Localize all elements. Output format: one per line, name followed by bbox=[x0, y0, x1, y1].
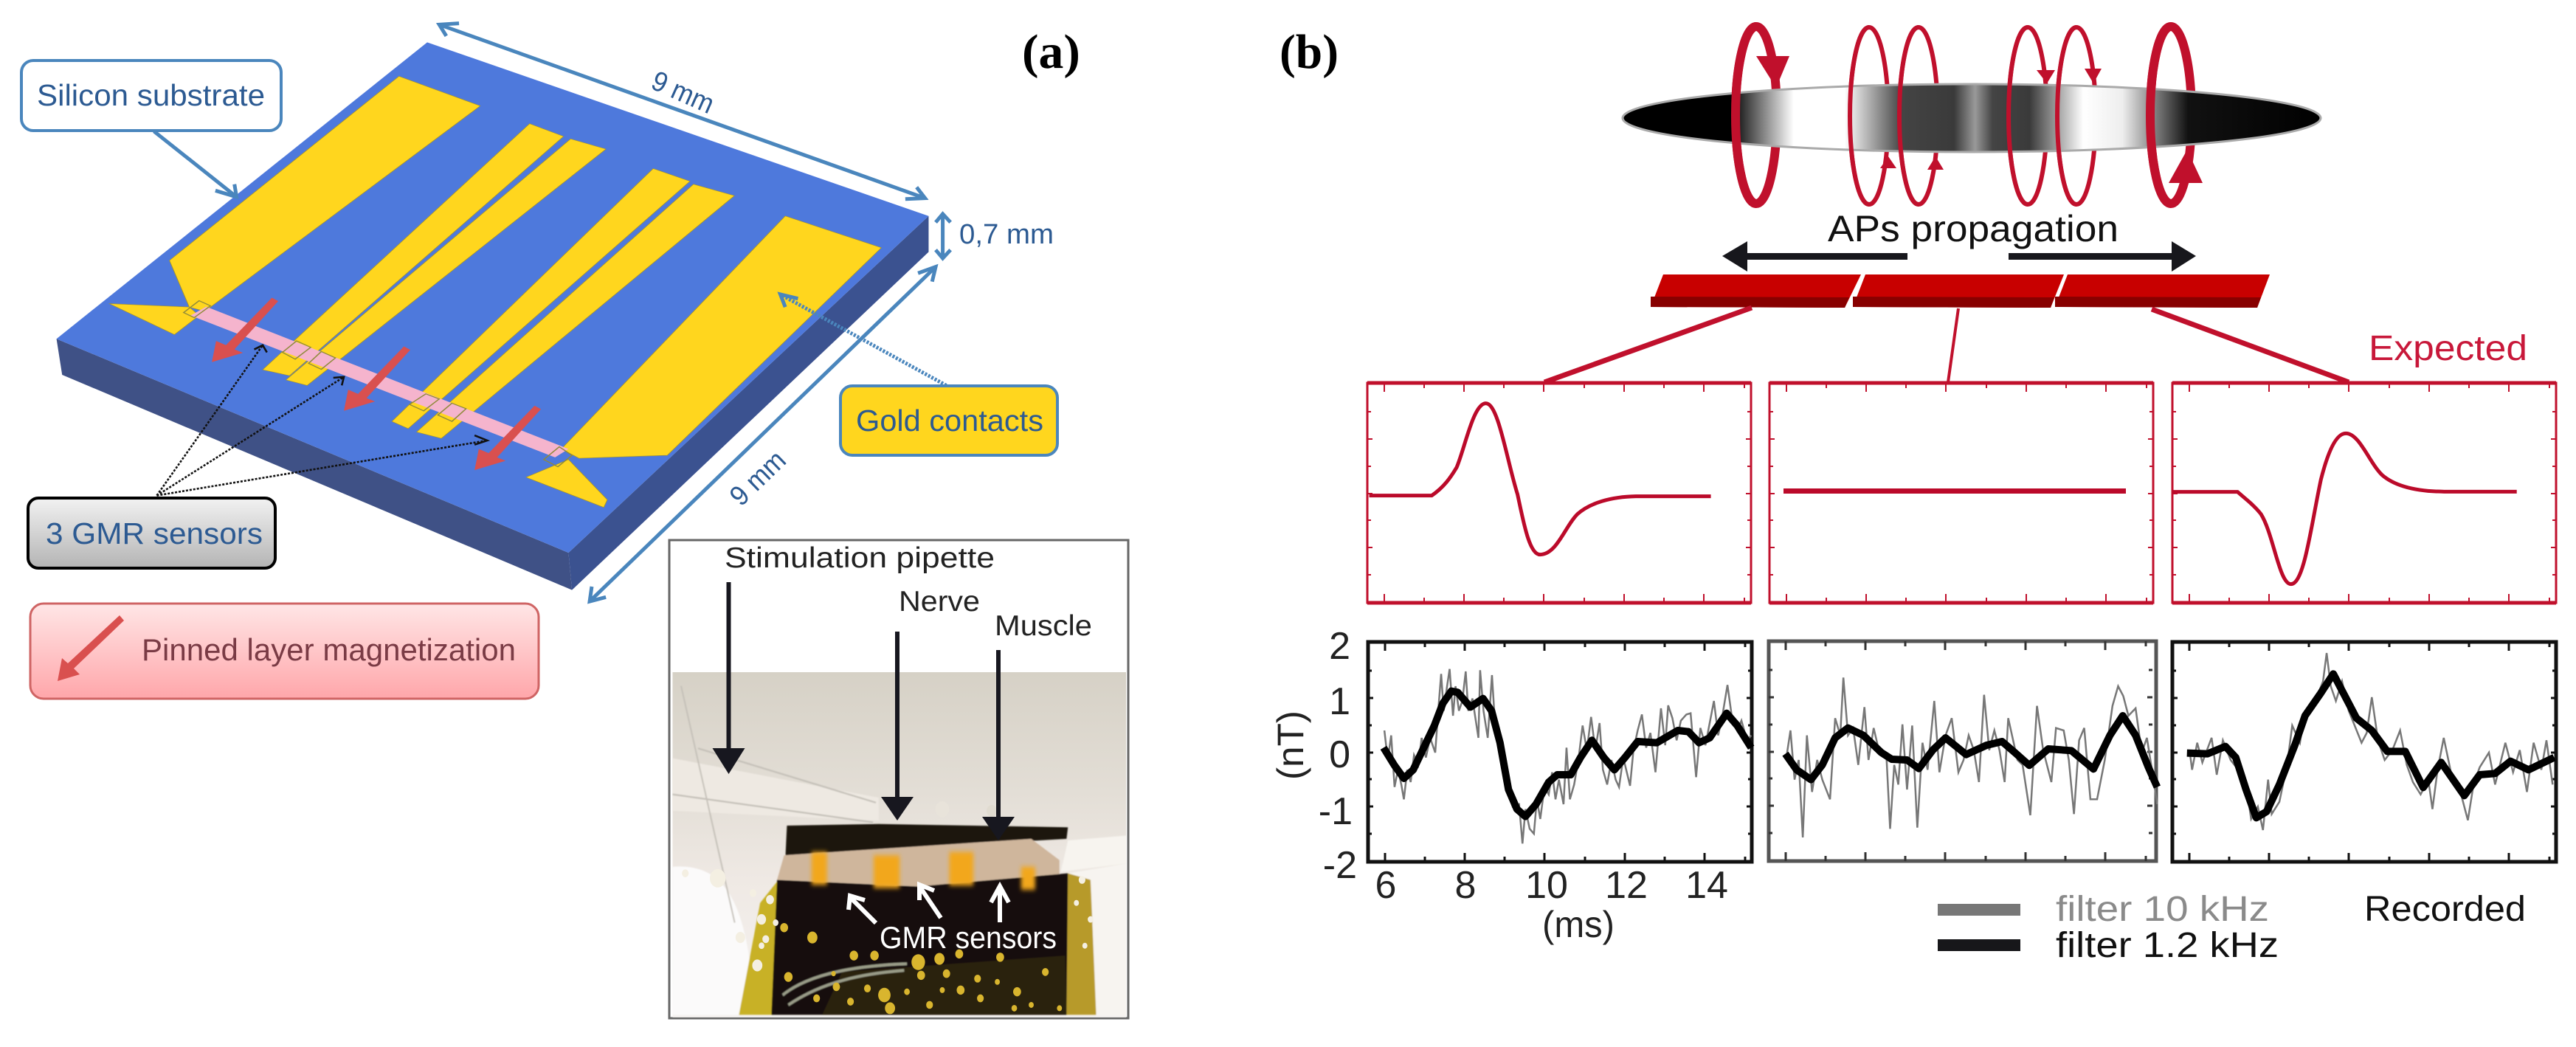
chart: recorded signal right bbox=[2172, 642, 2556, 862]
dimension label: thickness: 0,7 mm bbox=[959, 219, 1054, 250]
gold sensor traces seen through nerve bbox=[812, 852, 1035, 890]
dotted leader to gold contact bbox=[780, 294, 946, 385]
y axis tick labels: -2 bbox=[1323, 844, 1357, 887]
dotted arrows to sensors bbox=[156, 345, 487, 496]
sensor bar 3 bbox=[2055, 274, 2270, 308]
white arrow 3 bbox=[991, 886, 1009, 922]
leader line to silicon substrate bbox=[154, 131, 237, 197]
x axis tick labels bbox=[1375, 864, 1728, 907]
photo label: GMR sensors: GMR sensors bbox=[880, 920, 1057, 955]
white arrow 2 bbox=[919, 885, 941, 918]
dimension arrow: 0,7 mm bbox=[936, 214, 950, 258]
arrow: nerve bbox=[881, 632, 914, 820]
diagram: GMR chip on silicon substrate bbox=[57, 24, 950, 601]
panel label (b): (b) bbox=[1280, 25, 1339, 79]
y axis tick labels: 2 bbox=[1329, 625, 1350, 668]
arrow: stimulation pipette bbox=[713, 582, 745, 774]
callout: 3 GMR sensors: 3 GMR sensors bbox=[46, 516, 263, 550]
gold contacts bbox=[109, 76, 881, 508]
10 kHz trace bbox=[1786, 677, 2157, 837]
x axis tick labels: 10 bbox=[1525, 864, 1568, 907]
dimension label: top 9 mm: 9 mm bbox=[646, 66, 719, 120]
ring fronts bbox=[1736, 27, 2171, 204]
arrow: propagation left bbox=[1722, 241, 1907, 272]
arrow: muscle bbox=[982, 650, 1015, 840]
10 kHz trace bbox=[2189, 653, 2552, 830]
sensor bar 1 bbox=[1651, 274, 1861, 308]
pinned layer arrow 1 bbox=[212, 298, 278, 362]
dimension arrow: side 9 mm bbox=[590, 267, 936, 601]
gold and white droplets bbox=[780, 923, 1062, 1014]
field direction arrowheads bbox=[1756, 56, 2203, 183]
ring backs bbox=[1736, 27, 2192, 204]
callout: silicon substrate: Silicon substrate bbox=[37, 78, 265, 112]
chart: recorded signal left bbox=[1368, 642, 1752, 862]
swatch 10 kHz bbox=[1938, 904, 2020, 916]
icon: pinned layer arrow bbox=[58, 615, 124, 681]
callout: silicon substrate bbox=[21, 61, 281, 131]
pinned layer arrow 3 bbox=[474, 406, 541, 470]
pinned layer arrow 2 bbox=[344, 347, 410, 411]
white arrow 1 bbox=[849, 896, 876, 923]
y axis tick labels bbox=[1319, 625, 1357, 887]
legend: filter bbox=[1938, 890, 2279, 965]
diagram: nerve with magnetic field rings bbox=[1623, 27, 2321, 204]
1.2 kHz trace bbox=[1384, 691, 1751, 817]
y axis tick labels: 1 bbox=[1329, 680, 1350, 723]
10 kHz trace bbox=[1384, 669, 1751, 843]
1.2 kHz trace bbox=[2187, 674, 2554, 818]
chart: expected signal right bbox=[2172, 383, 2556, 603]
x axis tick labels: 8 bbox=[1455, 864, 1476, 907]
x axis tick labels: 12 bbox=[1605, 864, 1648, 907]
chart: expected signal middle bbox=[1769, 383, 2153, 603]
chip top surface bbox=[57, 42, 928, 553]
callout: gold contacts: Gold contacts bbox=[856, 404, 1043, 438]
text: APs propagation: APs propagation bbox=[1828, 208, 2119, 249]
legend: pinned layer magnetization bbox=[30, 604, 539, 699]
panel: experiment photo bbox=[669, 540, 1128, 1018]
sensor bar 2 bbox=[1853, 274, 2064, 308]
label 10 kHz: filter 10 kHz bbox=[2056, 890, 2269, 929]
sensor junction outlines bbox=[184, 301, 572, 467]
callout: 3 GMR sensors bbox=[28, 498, 275, 568]
chip left side face bbox=[57, 339, 572, 590]
swatch 1.2 kHz bbox=[1938, 939, 2020, 951]
chart: recorded signal middle bbox=[1769, 641, 2157, 861]
chip right side face bbox=[568, 216, 928, 590]
connector lines to expected plots bbox=[1544, 308, 2349, 382]
1.2 kHz trace bbox=[1785, 716, 2157, 787]
y axis tick labels: 0 bbox=[1329, 733, 1350, 776]
dimension label: side 9 mm: 9 mm bbox=[724, 445, 793, 512]
callout: gold contacts bbox=[840, 386, 1057, 455]
legend: pinned layer magnetization: Pinned layer magnetization bbox=[142, 632, 516, 667]
y axis label: (nT) bbox=[1270, 711, 1311, 780]
label: Recorded: Recorded bbox=[2364, 890, 2526, 929]
arrow: propagation right bbox=[2009, 241, 2196, 272]
y axis tick labels: -1 bbox=[1319, 790, 1353, 833]
nerve fibre bbox=[1623, 84, 2321, 152]
label: stimulation pipette: Stimulation pipette bbox=[725, 542, 995, 574]
leader head to gold contact bbox=[780, 294, 798, 307]
dimension arrow: top 9 mm bbox=[439, 24, 925, 199]
x axis label: (ms) bbox=[1542, 904, 1615, 945]
x axis tick labels: 6 bbox=[1375, 864, 1396, 907]
label: nerve: Nerve bbox=[899, 586, 980, 618]
label: muscle: Muscle bbox=[995, 610, 1092, 642]
panel label (a): (a) bbox=[1022, 25, 1080, 79]
chart: expected signal left bbox=[1367, 383, 1751, 603]
label 1.2 kHz: filter 1.2 kHz bbox=[2056, 926, 2279, 965]
x axis tick labels: 14 bbox=[1685, 864, 1728, 907]
photo: nerve on chip bbox=[672, 672, 1128, 1017]
label: Expected: Expected bbox=[2369, 329, 2527, 368]
GMR sensor strip bbox=[190, 307, 568, 457]
